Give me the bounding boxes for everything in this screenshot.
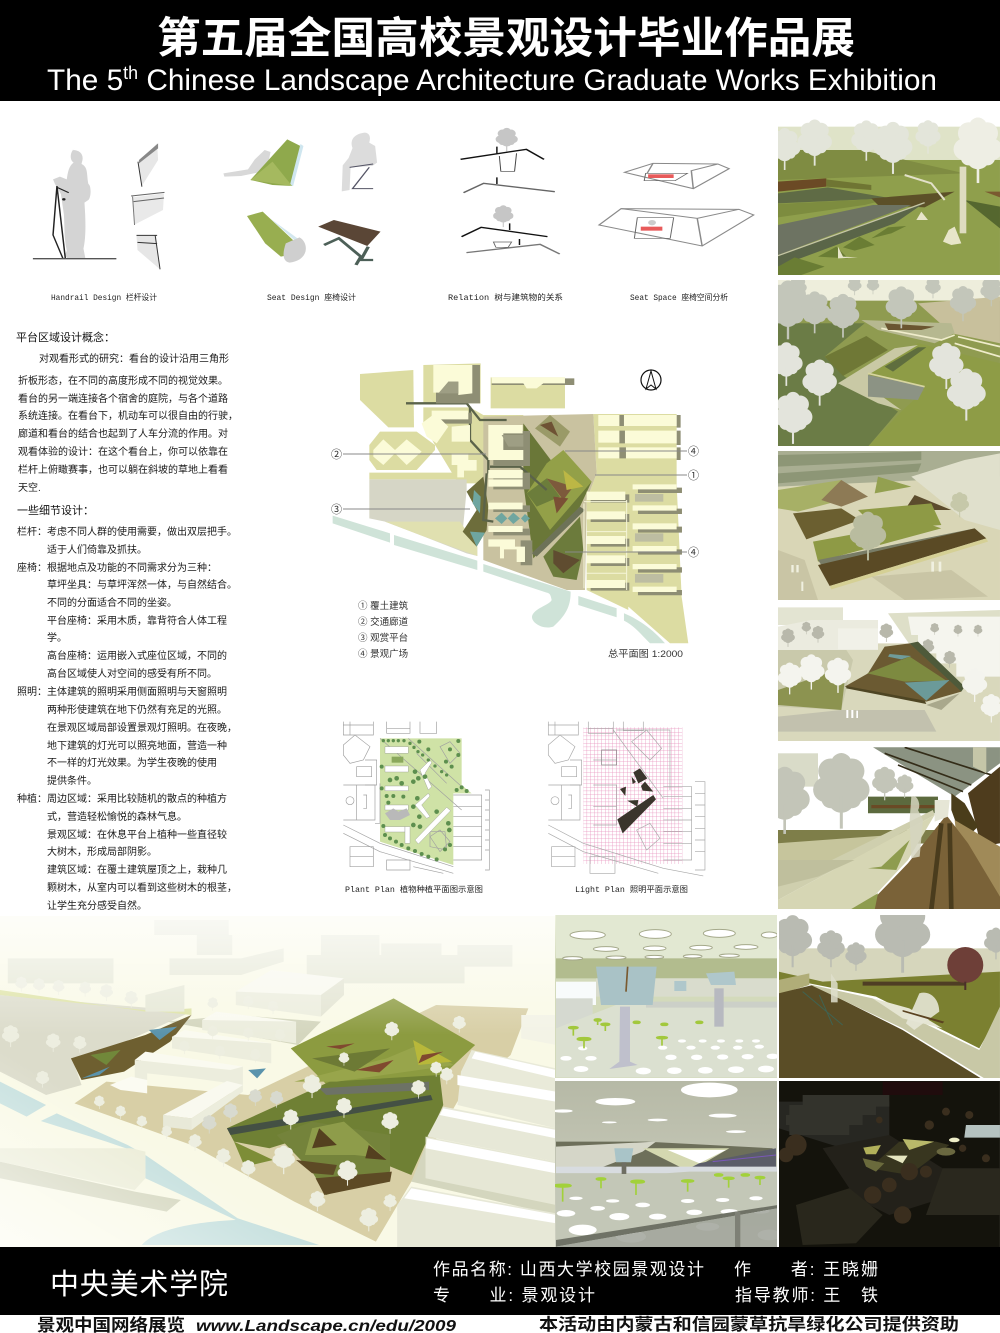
english subtitle: Chinese Landscape Architecture Graduate Works Exhibition [138,64,937,97]
plan leader callouts: ③ [331,503,342,516]
central landscape roof [523,415,592,580]
plan legend [358,600,409,660]
railing option 3 [136,235,160,269]
diagram: tree and building relation [461,128,560,254]
details paragraph [17,525,237,912]
plan leader callouts: ② [331,448,342,461]
white building footprints [385,747,451,844]
white fades [0,916,555,1028]
plan legend: ② 交通廊道 [358,616,409,628]
pink lighting grid [583,727,682,864]
details paragraph: 大树木，形成局部阴影。 [47,845,157,858]
school name: 中央美术学院 [50,1268,228,1301]
rendering: lawn view [769,117,1000,277]
concept paragraph: 天空. [18,481,41,494]
details paragraph: 照明：主体建筑的照明采用侧面照明与天窗照明 [17,685,227,698]
rendering: sunken seating view [778,451,1000,601]
diagram: seat design [223,133,381,265]
viewing platform [463,477,530,547]
details paragraph: 平台座椅：采用木质，靠背符合人体工程 [47,614,227,627]
rendering: covered walkway view [760,747,1000,910]
details paragraph: 草坪坐具：与草坪浑然一体，与自然结合。 [47,578,237,591]
white massing buildings [0,920,556,1248]
icon: lower wireframe [599,209,754,246]
buildings with shadows [373,365,682,595]
rendering: interior hall skylights [553,1080,781,1248]
details paragraph: 不同的分面适合不同的坐姿。 [47,596,177,609]
lighting plan [548,722,705,876]
rendering: park seating view [779,915,1000,1078]
railing option 2 [131,192,164,225]
icon: green lawn seat lower [247,212,305,257]
concept paragraph: 看台的另一端连接各个宿舍的庭院，与各个道路 [18,392,228,405]
concept paragraph: 折板形态，在不同的高度形成不同的视觉效果。 [18,374,228,387]
icon: seated person with stool [342,133,377,191]
field [0,995,191,1095]
plan leader callouts: ④ [688,546,699,559]
work details: 专 业: 景观设计 [433,1286,595,1305]
planting green zone [380,738,472,865]
details paragraph: 不一样的灯光效果。为学生夜晚的使用 [47,756,217,769]
footer band [0,1247,1000,1315]
bottom credit strip [0,1314,1000,1333]
plan leader callouts [331,445,699,559]
work details: 作 者: 王晓姗 [734,1260,878,1279]
river water [0,1082,319,1245]
rendering: platform aerial view [778,606,1000,743]
river [333,516,665,643]
sports field [369,479,477,556]
details paragraph: 在景观区域局部设置景观灯照明。在夜晚， [47,721,237,734]
details paragraph: 适于人们倚靠及抓扶。 [47,543,147,556]
icon: wooden bench [318,220,381,265]
details paragraph: 高台区域使人对空间的感受有所不同。 [47,667,217,680]
heading: platform concept: 平台区域设计概念： [16,330,115,344]
captions: plan row: Light Plan 照明平面示意图 [575,884,688,895]
plan scale caption: 总平面图 1:2000 [608,648,683,660]
work details [433,1260,878,1305]
main roofs [290,998,475,1084]
planting plan [343,722,489,873]
tan site ground [74,1005,528,1242]
dark building plan shapes [617,768,656,833]
heading: details: 一些细节设计： [17,503,94,517]
railing option 1 [138,143,158,187]
icon: green lawn seat upper [250,139,300,186]
details paragraph: 地下建筑的灯光可以照亮地面，营造一种 [47,739,227,752]
site master plan [333,363,688,643]
details paragraph: 建筑区域：在覆土建筑屋顶之上，栽种几 [47,863,227,876]
concept paragraph: 廊道和看台的结合也起到了人车分流的作用。对 [18,427,228,440]
tree dots [380,739,469,861]
gray court [385,808,410,820]
details paragraph: 栏杆：考虑不同人群的使用需要，做出双层把手。 [17,525,237,538]
text block: concept [16,330,238,494]
plan legend: ③ 观赏平台 [358,632,408,644]
central slab buildings [110,970,344,1130]
north arrow [641,370,661,390]
chinese title: 第五届全国高校景观设计毕业作品展 [157,15,855,63]
icon: lower tree section [462,205,560,254]
work details: 作品名称: 山西大学校园景观设计 [433,1260,704,1279]
captions: diagram row: Seat Space 座椅空间分析 [630,292,728,303]
captions: plan row: Plant Plan 植物种植平面图示意图 [345,884,483,895]
base plan linework [343,722,489,873]
work details: 指导教师: 王 铁 [735,1286,878,1305]
captions: diagram row: Relation 树与建筑物的关系 [448,292,563,303]
details paragraph: 让学生充分感受自然。 [47,899,147,912]
captions: diagram row: Seat Design 座椅设计 [267,292,356,303]
plan legend: ④ 景观广场 [358,648,408,660]
tan ground [483,414,597,590]
details paragraph: 颗树木，从室内可以看到这些树木的根茎， [47,881,237,894]
icon: upper tree section [461,128,555,193]
rendering: interior hall day [555,915,779,1078]
details paragraph: 高台座椅：运用嵌入式座位区域，不同的 [47,649,227,662]
details paragraph: 提供条件。 [47,774,97,787]
corridors [406,403,547,522]
plan leader callouts: ① [688,469,699,482]
details paragraph: 种植：周边区域：采用比较随机的散点的种植方 [17,792,227,805]
icon: standing person silhouette [53,149,91,259]
rendering: courtyard view [766,276,1000,449]
text block: details [17,503,237,912]
icon: upper wireframe [625,163,729,189]
concept paragraph: 观看体验的设计：在这个看台上，你可以依靠在 [18,445,228,458]
details paragraph: 两种形使建筑在地下仍然有充足的光照。 [47,703,227,716]
land parcels [360,363,688,643]
pale trees [2,977,466,1231]
english subtitle: The 5 [47,64,124,97]
concept paragraph [18,352,238,494]
viewing platform [71,1015,191,1080]
ground shadows [0,1015,556,1215]
details paragraph: 座椅：根据地点及功能的不同需求分为三种： [17,561,217,574]
concept paragraph: 栏杆上俯瞰赛事，也可以躺在斜坡的草地上看看 [18,463,228,476]
diagram: seat space analysis [599,163,754,246]
details paragraph: 式，营造轻松愉悦的森林气息。 [47,810,187,823]
rendering: night aerial view [779,1080,1000,1248]
rendering: campus aerial view [0,915,556,1248]
details paragraph: 景观区域：在休息平台上植种一些直径较 [47,828,227,841]
plan leader callouts: ④ [688,445,699,458]
railing profile lines [53,186,69,258]
english subtitle: th [123,63,138,83]
captions: diagram row [51,292,728,303]
captions: diagram row: Handrail Design 栏杆设计 [51,292,157,303]
right block buildings [397,1015,556,1248]
captions: plan row [345,884,688,895]
plan legend: ① 覆土建筑 [358,600,409,612]
icon: person reclining on lawn seat [223,150,271,177]
concept paragraph: 对观看形式的研究：看台的设计沿用三角形 [39,352,229,365]
concept paragraph: 系统连接。在看台下，机动车可以很自由的行驶， [18,409,238,422]
base plan linework [548,722,705,876]
details paragraph: 学。 [47,631,67,644]
header band [0,0,1000,101]
diagram: handrail design [33,143,164,269]
